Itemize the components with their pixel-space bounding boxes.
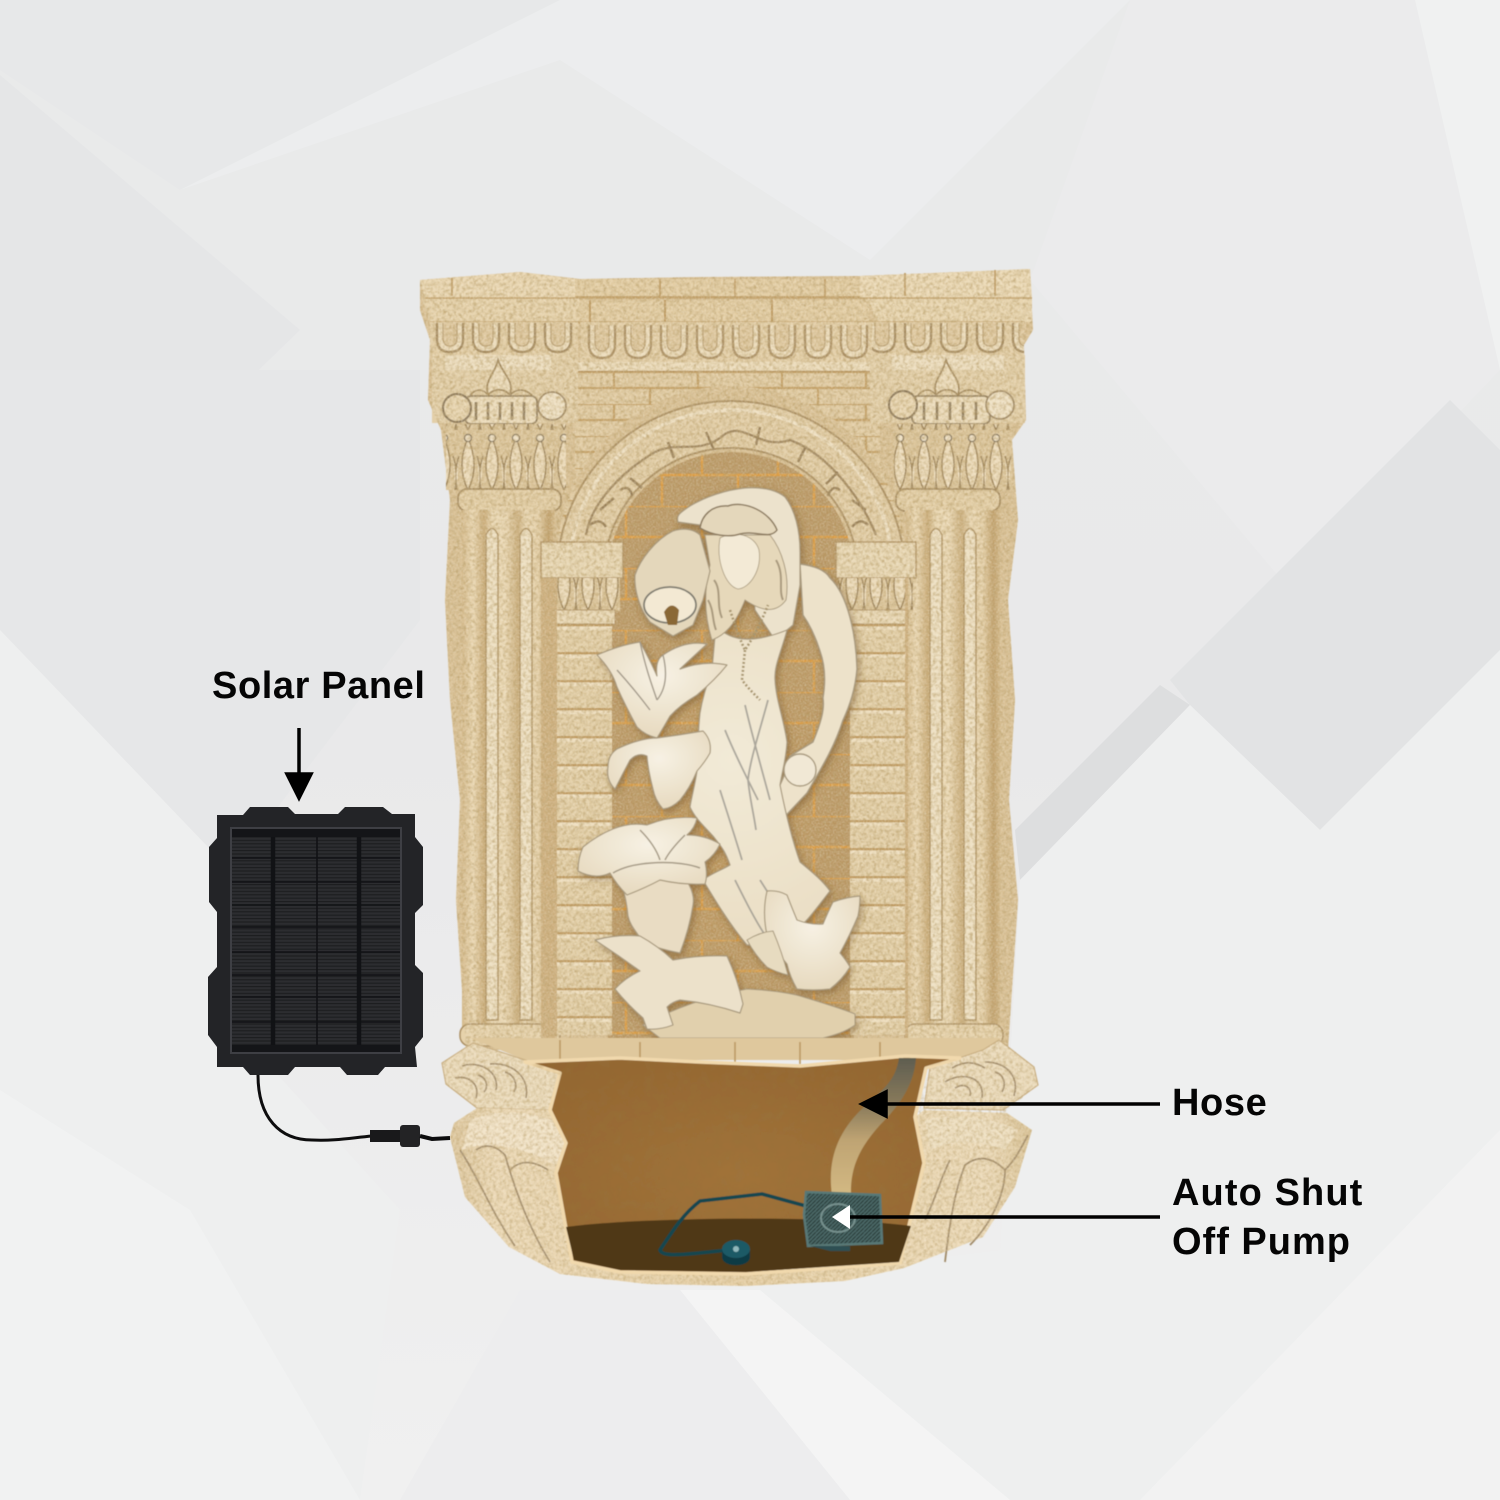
stone texture on wall — [415, 265, 1045, 1055]
drooping leaves — [608, 731, 710, 809]
fan leaf — [747, 931, 788, 975]
wall silhouette — [420, 269, 1033, 1050]
upper lily — [597, 642, 727, 738]
pump arrow line — [850, 1215, 1160, 1219]
small left column — [541, 542, 623, 1035]
lower left lily — [578, 817, 720, 953]
label: Hose with arrow — [862, 1082, 1267, 1124]
cut-away interior — [520, 1050, 965, 1275]
egg and dart frieze — [430, 322, 1024, 372]
water floor — [566, 1219, 911, 1272]
hose — [831, 1058, 916, 1195]
raised arm and drapery — [678, 488, 800, 640]
upper rim left — [442, 1043, 560, 1110]
small right column — [836, 542, 916, 1035]
basin stone texture — [440, 1038, 1040, 1288]
stone ledge above cut-away — [470, 1038, 1000, 1064]
label: Auto Shut Off Pump with arrow: Off Pump — [1172, 1221, 1351, 1263]
solar cable and connector — [258, 1075, 450, 1147]
carved arch band — [557, 401, 905, 575]
left large column — [460, 510, 560, 1046]
label: Hose with arrow: Hose — [1172, 1082, 1267, 1124]
label: Auto Shut Off Pump with arrow: Auto Shut — [1172, 1172, 1363, 1214]
label: Auto Shut Off Pump with arrow — [832, 1172, 1363, 1263]
flower crown — [700, 504, 777, 536]
top cornice — [420, 269, 1032, 323]
arrow to hose — [862, 1092, 1160, 1116]
face — [719, 534, 759, 589]
infographic canvas — [208, 268, 1500, 1500]
LED nozzle — [722, 1240, 750, 1265]
pump with slotted grille — [804, 1192, 882, 1251]
skirt and body — [690, 625, 830, 945]
jug — [635, 529, 710, 636]
niche recess with glowing brick — [605, 452, 855, 1060]
photovoltaic surface — [230, 827, 402, 1054]
basin outer shell — [442, 1040, 1038, 1286]
label: Solar Panel: Solar Panel — [212, 665, 426, 707]
floating light cable — [660, 1194, 806, 1255]
left capital — [432, 355, 578, 511]
strip walls flanking small columns — [541, 578, 908, 1038]
label: Solar Panel — [212, 665, 426, 798]
necklace — [730, 605, 768, 700]
arrow to solar panel — [287, 728, 311, 798]
pump arrow white head — [832, 1205, 850, 1229]
brick spandrels around arch — [557, 372, 905, 560]
scarf flower — [784, 754, 816, 786]
right capital — [870, 355, 1025, 511]
panel frame — [208, 807, 423, 1075]
upper rim right — [924, 1040, 1038, 1110]
right lily — [764, 891, 860, 990]
hair — [705, 535, 787, 640]
base leaves — [595, 936, 743, 1029]
lower bowl — [450, 1108, 1032, 1286]
statue: woman pouring jug among lilies — [578, 488, 860, 1038]
right large column — [905, 510, 1003, 1046]
rock base — [643, 989, 855, 1038]
fountain — [415, 265, 1045, 1288]
scarf — [738, 564, 857, 873]
bowl petal carving — [460, 1135, 1028, 1262]
solar panel — [208, 807, 450, 1147]
